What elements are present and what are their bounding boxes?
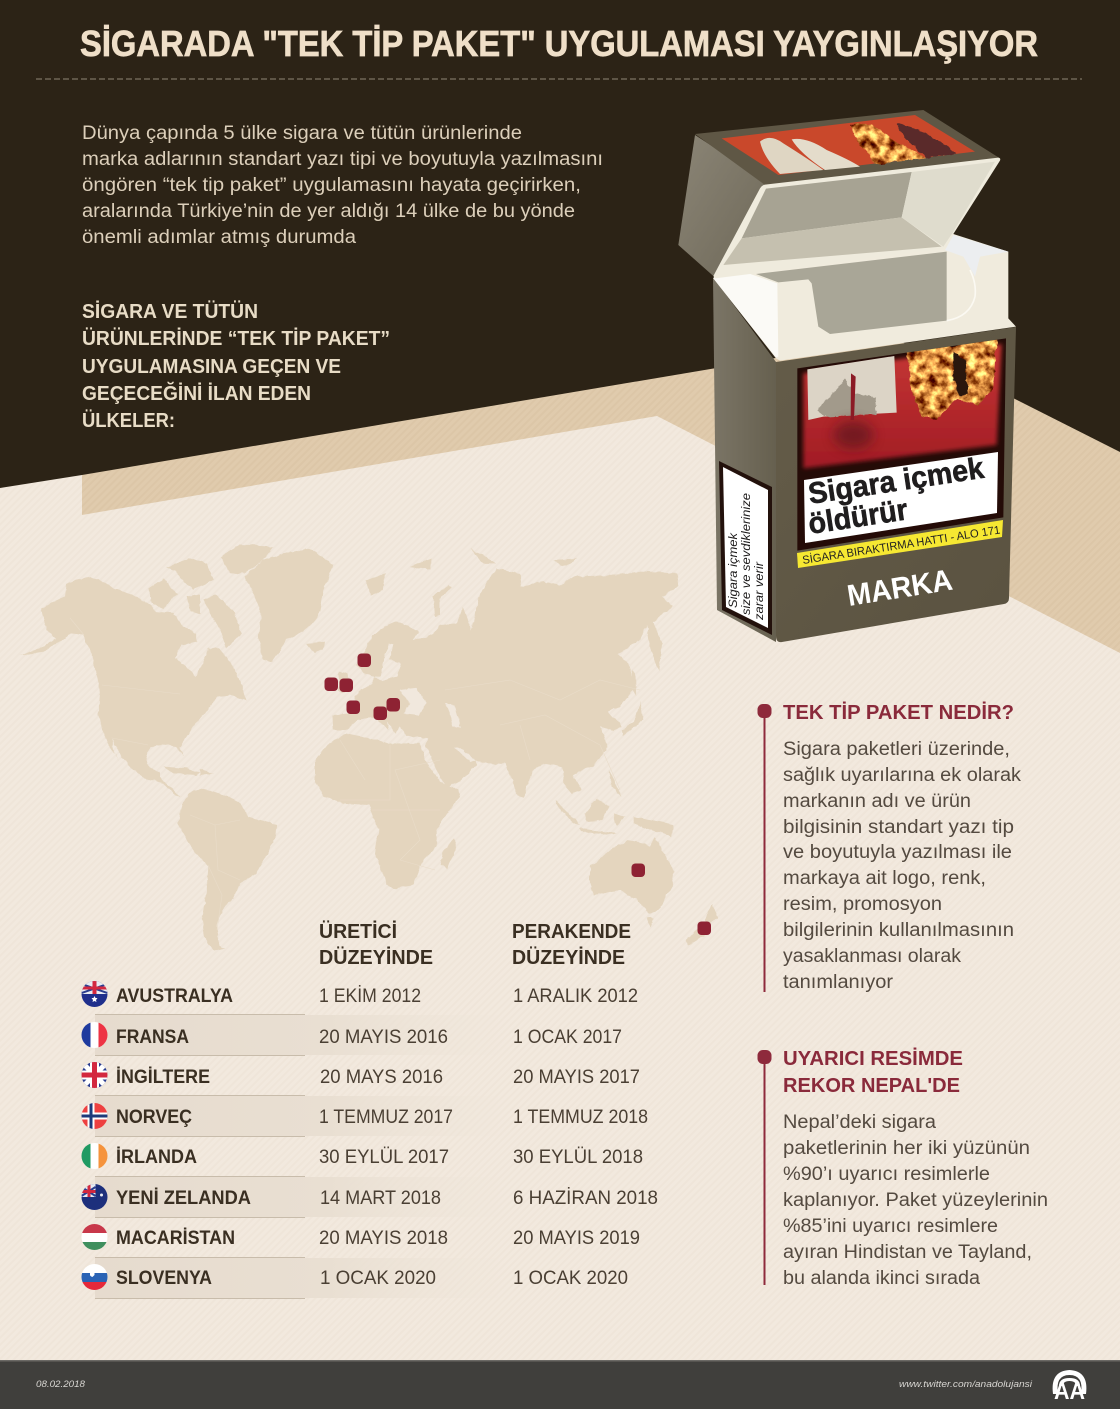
intro text: önemli adımlar atmış durumda bbox=[82, 227, 356, 248]
background: cream page area bbox=[0, 416, 1120, 1409]
intro text: aralarında Türkiye’nin de yer aldığı 14 ülke de bu yönde bbox=[82, 201, 575, 222]
panel: Nepal record: paketlerinin her iki yüzünün bbox=[783, 1138, 1030, 1159]
subheading: ÜLKELER: bbox=[82, 409, 175, 432]
panel: what is plain packaging: ve boyutuyla yazılması ile bbox=[783, 842, 1012, 863]
flag: Slovenia bbox=[82, 1264, 108, 1290]
table: manufacturer dates: 30 EYLÜL 2017 bbox=[319, 1147, 449, 1168]
warning label: öldürür bbox=[806, 493, 910, 541]
table: country names: SLOVENYA bbox=[116, 1268, 212, 1289]
world map bbox=[20, 545, 718, 951]
flag: Ireland bbox=[82, 1143, 108, 1169]
panel: what is plain packaging: bilgisinin standart yazı tip bbox=[783, 817, 1014, 838]
footer bar: www.twitter.com/anadolujansi bbox=[899, 1379, 1033, 1390]
panel: Nepal record bbox=[758, 1047, 1048, 1289]
intro text bbox=[82, 123, 603, 248]
panel: Nepal record: UYARICI RESİMDE bbox=[783, 1047, 963, 1070]
panel: what is plain packaging: tanımlanıyor bbox=[783, 972, 894, 993]
background: tan diagonal band bbox=[82, 338, 1120, 700]
table: retail dates bbox=[513, 986, 658, 1289]
panel: what is plain packaging: markanın adı ve ürün bbox=[783, 791, 971, 812]
panel: Nepal record: REKOR NEPAL'DE bbox=[783, 1075, 960, 1097]
table: manufacturer dates: 14 MART 2018 bbox=[320, 1188, 441, 1209]
brand name: MARKA bbox=[845, 564, 955, 613]
panel: what is plain packaging: sağlık uyarılarına ek olarak bbox=[783, 765, 1022, 786]
cigarette pack bbox=[678, 110, 1016, 642]
intro text: öngören “tek tip paket” uygulamasını hayata geçirirken, bbox=[82, 175, 581, 196]
map country borders bbox=[70, 618, 640, 930]
flag: Norway bbox=[82, 1103, 108, 1129]
table: retail dates: 20 MAYIS 2017 bbox=[513, 1067, 640, 1088]
side warning label: zarar verir bbox=[752, 561, 766, 621]
table: retail dates: 1 ARALIK 2012 bbox=[513, 986, 638, 1007]
flag: Hungary bbox=[82, 1224, 108, 1250]
table: manufacturer dates: 1 OCAK 2020 bbox=[320, 1268, 436, 1289]
table: country names: YENİ ZELANDA bbox=[116, 1188, 251, 1209]
table: manufacturer dates: 20 MAYS 2016 bbox=[320, 1067, 443, 1088]
map markers bbox=[324, 654, 711, 935]
table: retail dates: 1 OCAK 2017 bbox=[513, 1027, 622, 1048]
panel: what is plain packaging: Sigara paketleri üzerinde, bbox=[783, 739, 1010, 760]
panel: what is plain packaging: TEK TİP PAKET NEDİR? bbox=[783, 701, 1014, 724]
panel: Nepal record: kaplanıyor. Paket yüzeylerinin bbox=[783, 1190, 1048, 1211]
warning label: Sigara içmek bbox=[806, 452, 986, 511]
footer bar: 08.02.2018 bbox=[36, 1379, 86, 1390]
subheading: UYGULAMASINA GEÇEN VE bbox=[82, 356, 341, 378]
panel: what is plain packaging: markaya ait logo, renk, bbox=[783, 868, 986, 889]
pack side panel bbox=[713, 277, 776, 642]
title: SİGARADA "TEK TİP PAKET" UYGULAMASI YAYGINLAŞIYOR bbox=[80, 23, 1038, 64]
warning label bbox=[804, 452, 998, 543]
panel: Nepal record: %85’ini uyarıcı resimlere bbox=[783, 1216, 998, 1237]
intro text: marka adlarının standart yazı tipi ve boyutuyla yazılmasını bbox=[82, 149, 603, 170]
icon: agency logo: AA bbox=[1054, 1378, 1085, 1405]
side warning label: Sigara içmek bbox=[726, 532, 740, 608]
panel: Nepal record: ayıran Hindistan ve Tayland, bbox=[783, 1242, 1032, 1263]
flag: United Kingdom bbox=[82, 1062, 108, 1088]
panel: Nepal record: Nepal’deki sigara bbox=[783, 1112, 936, 1133]
table: retail dates: 30 EYLÜL 2018 bbox=[513, 1147, 643, 1168]
health warning picture bbox=[797, 338, 1006, 551]
table: column headers: ÜRETİCİ bbox=[319, 920, 397, 943]
panel: Nepal record: bu alanda ikinci sırada bbox=[783, 1268, 980, 1289]
table: manufacturer dates bbox=[319, 986, 453, 1289]
panel: what is plain packaging: yasaklanması olarak bbox=[783, 946, 961, 967]
subheading: ÜRÜNLERİNDE “TEK TİP PAKET” bbox=[82, 327, 390, 350]
table: column headers bbox=[319, 920, 631, 969]
flag: New Zealand bbox=[82, 1184, 108, 1210]
table: column headers: PERAKENDE bbox=[512, 921, 631, 943]
table: manufacturer dates: 20 MAYIS 2016 bbox=[319, 1027, 448, 1048]
side warning label: size ve sevdiklerinize bbox=[739, 493, 753, 615]
intro text: Dünya çapında 5 ülke sigara ve tütün ürünlerinde bbox=[82, 123, 522, 144]
table: column headers: DÜZEYİNDE bbox=[512, 946, 625, 969]
table: country names: FRANSA bbox=[116, 1027, 189, 1048]
panel: what is plain packaging bbox=[758, 701, 1022, 993]
table: country names: İRLANDA bbox=[116, 1147, 197, 1168]
panel: Nepal record: %90’ı uyarıcı resimlerle bbox=[783, 1164, 990, 1185]
flag: France bbox=[82, 1022, 108, 1048]
subheading: SİGARA VE TÜTÜN bbox=[82, 300, 258, 323]
subheading bbox=[82, 300, 390, 432]
table: country names: MACARİSTAN bbox=[116, 1228, 235, 1249]
table: country names: İNGİLTERE bbox=[116, 1067, 210, 1088]
table: retail dates: 1 TEMMUZ 2018 bbox=[513, 1107, 648, 1128]
table: manufacturer dates: 20 MAYIS 2018 bbox=[319, 1228, 448, 1249]
subheading: GEÇECEĞİNİ İLAN EDEN bbox=[82, 381, 311, 405]
table: country names: NORVEÇ bbox=[116, 1107, 192, 1128]
pack front face bbox=[776, 327, 1016, 642]
pack inner liner bbox=[713, 234, 1016, 361]
pack lid bbox=[678, 110, 1000, 278]
table: retail dates: 6 HAZİRAN 2018 bbox=[513, 1188, 658, 1209]
table: retail dates: 1 OCAK 2020 bbox=[513, 1268, 628, 1289]
panel: what is plain packaging: resim, promosyon bbox=[783, 894, 942, 915]
table: retail dates: 20 MAYIS 2019 bbox=[513, 1228, 640, 1249]
table: manufacturer dates: 1 EKİM 2012 bbox=[319, 986, 421, 1007]
table: country names: AVUSTRALYA bbox=[116, 986, 233, 1007]
quit line strip: SİGARA BIRAKTIRMA HATTI - ALO 171 bbox=[801, 524, 1001, 567]
flag: Australia bbox=[82, 981, 108, 1007]
side warning label bbox=[719, 461, 772, 635]
table: row shading bbox=[95, 1015, 520, 1298]
footer bar bbox=[0, 1360, 1120, 1409]
panel: what is plain packaging: bilgilerinin kullanılmasının bbox=[783, 920, 1014, 941]
table: manufacturer dates: 1 TEMMUZ 2017 bbox=[319, 1107, 453, 1128]
table: country names bbox=[116, 986, 251, 1289]
table: column headers: DÜZEYİNDE bbox=[319, 946, 433, 969]
